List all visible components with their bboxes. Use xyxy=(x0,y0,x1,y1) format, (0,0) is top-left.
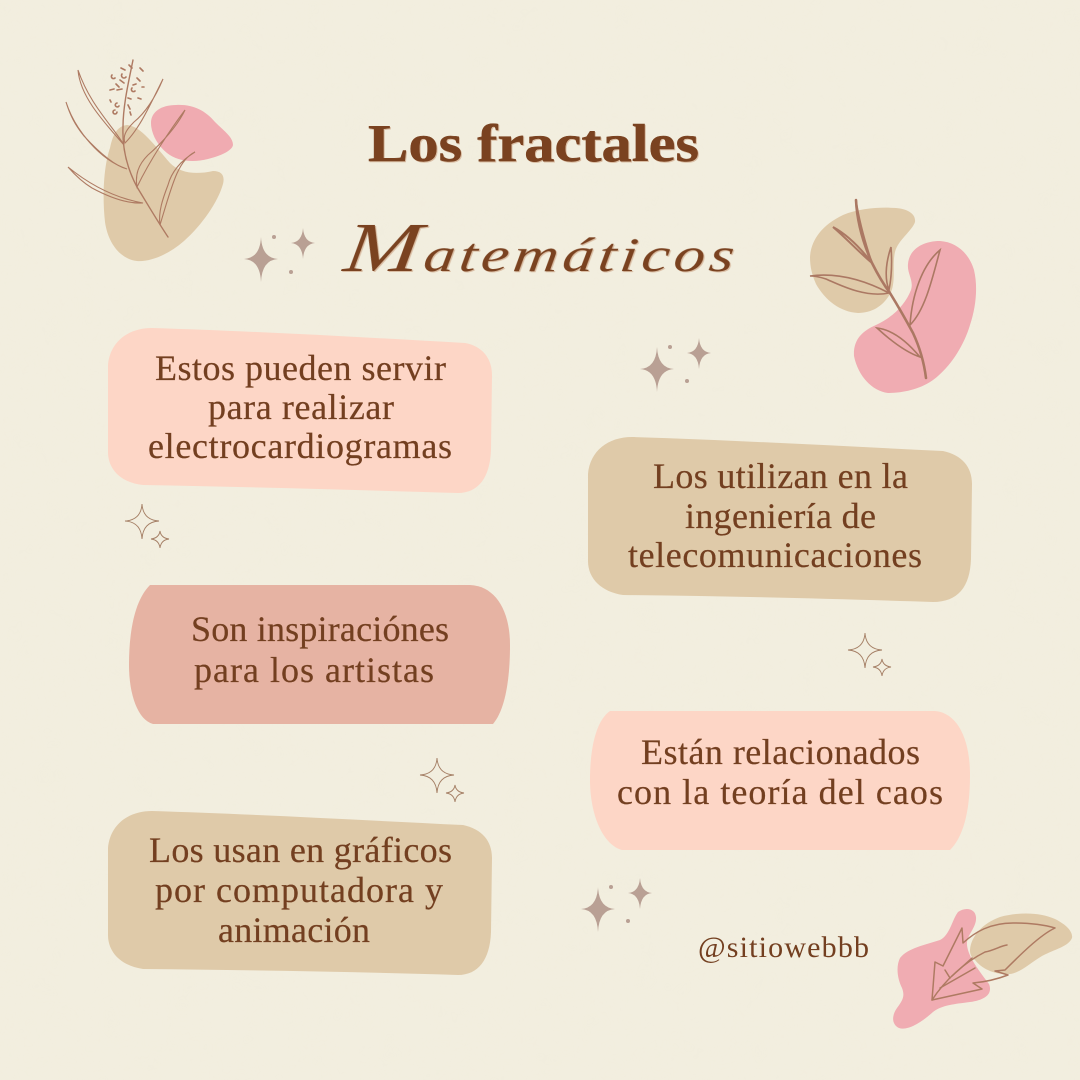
panel text xyxy=(617,732,943,812)
botanical line art xyxy=(66,60,195,237)
botanical line art xyxy=(810,200,940,378)
panel text xyxy=(149,830,452,950)
plant decoration: top left xyxy=(66,60,233,261)
outline sparkles: centre xyxy=(420,758,464,802)
pink blob xyxy=(854,241,976,393)
panel text: por computadora y xyxy=(155,870,443,910)
outline sparkles: left xyxy=(125,504,169,548)
title: Los fractales: Los fractales xyxy=(368,115,699,173)
panel text: Están relacionados xyxy=(641,732,920,772)
panel: telecomunicaciones xyxy=(588,437,972,602)
panel text xyxy=(148,348,452,466)
panel text: con la teoría del caos xyxy=(617,772,943,812)
handle: @sitiowebbb: @sitiowebbb xyxy=(698,931,869,964)
sparkles: bottom centre xyxy=(581,878,652,932)
pink blob xyxy=(151,105,233,161)
tan blob xyxy=(810,208,915,313)
sparkles: beside script title xyxy=(244,228,315,282)
outline sparkles: right xyxy=(848,633,891,676)
panel text: Los utilizan en la xyxy=(653,456,908,496)
panel: teoría del caos xyxy=(590,711,970,850)
panel text: telecomunicaciones xyxy=(628,535,922,575)
plant decoration: top right xyxy=(810,200,976,393)
panel text xyxy=(191,609,449,690)
subtitle: Matemáticos: Matemáticos xyxy=(339,208,741,286)
panel text: ingeniería de xyxy=(685,496,876,536)
tan blob xyxy=(104,125,224,261)
plant decoration: bottom right xyxy=(893,909,1072,1029)
tan blob xyxy=(970,913,1072,974)
pink blob xyxy=(893,909,990,1029)
panel text: para los artistas xyxy=(194,650,434,690)
panel text: electrocardiogramas xyxy=(148,426,452,466)
panel text: Los usan en gráficos xyxy=(149,830,452,870)
panel text: Estos pueden servir xyxy=(155,348,446,388)
panel: electrocardiogramas xyxy=(108,328,492,493)
leaf line art xyxy=(932,923,1055,1000)
panel: gráficos por computadora xyxy=(108,811,492,975)
panel text xyxy=(628,456,922,575)
panel: artistas xyxy=(129,585,510,724)
sparkles: right upper xyxy=(640,338,711,392)
panel text: animación xyxy=(218,910,370,950)
panel text: para realizar xyxy=(208,387,394,427)
panel text: Son inspiraciónes xyxy=(191,609,449,649)
